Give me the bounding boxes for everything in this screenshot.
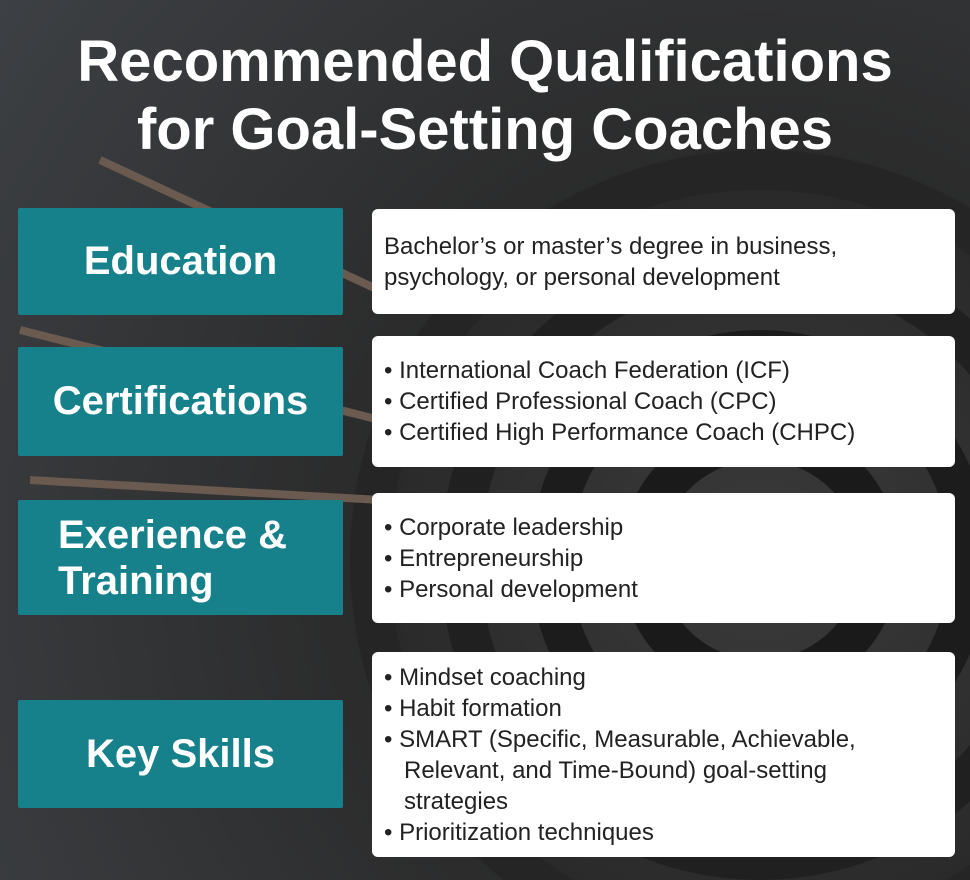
label: Certifications: Certifications	[53, 379, 308, 423]
text: Certifications: • Certified Professional Coach (CPC)	[384, 388, 777, 415]
text: Experience	[372, 493, 955, 623]
label: Key Skills	[18, 700, 343, 808]
text: Key Skills: • Mindset coaching	[384, 664, 586, 690]
label: Experience: Training	[58, 558, 214, 602]
label: Key Skills: Key Skills	[86, 732, 275, 776]
label: Education	[18, 208, 343, 315]
title: for Goal-Setting Coaches	[137, 97, 833, 162]
label: Experience	[18, 500, 343, 615]
text: Certifications: • Certified High Performance Coach (CHPC)	[384, 419, 855, 446]
text: Key Skills: Relevant, and Time-Bound) goal-setting	[404, 756, 827, 784]
title: Recommended Qualifications	[77, 29, 893, 94]
label: Certifications	[18, 347, 343, 456]
text: Key Skills: • SMART (Specific, Measurable, Achievable,	[384, 726, 856, 752]
text: Experience: • Corporate leadership	[384, 514, 623, 540]
text: Key Skills: • Prioritization techniques	[384, 818, 654, 846]
text: Key Skills	[372, 652, 955, 857]
text: Education: Bachelor’s or master’s degree in business, psychology, or personal development	[384, 232, 837, 290]
text: Certifications: • International Coach Federation (ICF)	[384, 357, 790, 384]
label: Experience: Exerience &	[58, 512, 287, 556]
text: Certifications	[372, 336, 955, 467]
title	[77, 29, 893, 162]
text: Key Skills: strategies	[404, 788, 508, 814]
text: Education	[372, 209, 955, 314]
text: Experience: • Entrepreneurship	[384, 544, 583, 572]
label: Education: Education	[84, 239, 277, 283]
text: Key Skills: • Habit formation	[384, 694, 562, 722]
text: Experience: • Personal development	[384, 576, 638, 602]
